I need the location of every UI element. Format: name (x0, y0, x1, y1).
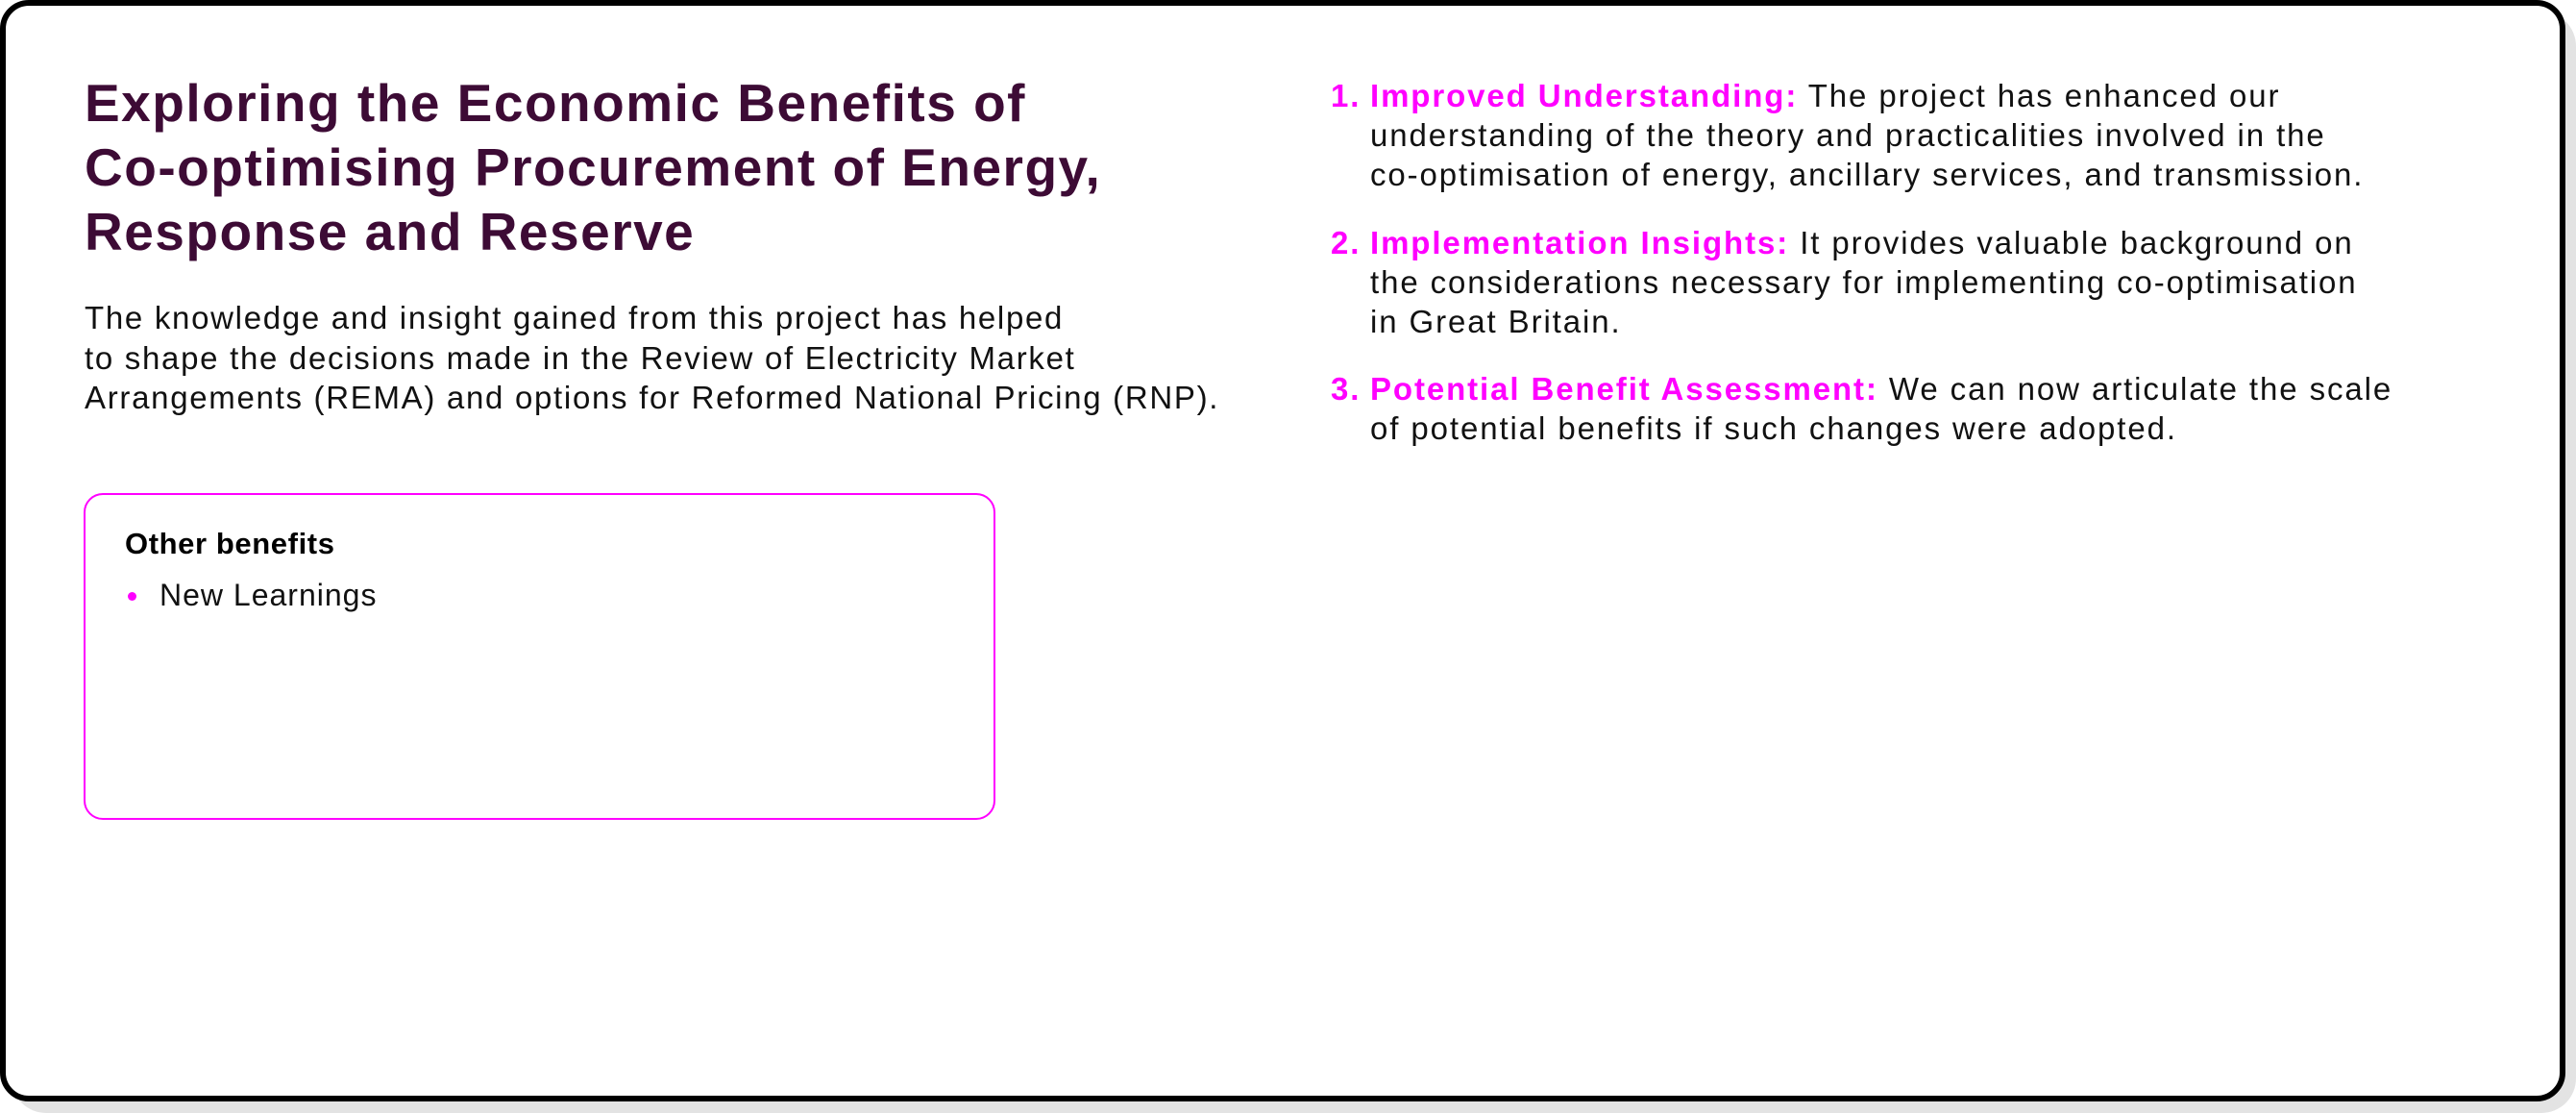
heading: other benefits: Other benefits (125, 527, 335, 560)
list item 2: in Great Britain. (1370, 304, 1622, 339)
list item 1 (1331, 78, 2364, 192)
intro paragraph: Arrangements (REMA) and options for Reformed National Pricing (RNP). (85, 380, 1219, 415)
list item 1: Improved Understanding: The project has enhanced our (1370, 78, 2280, 113)
list item 3 (1331, 371, 2392, 446)
bullet text: New Learnings (159, 578, 377, 612)
list item 2 (1331, 225, 2358, 339)
title: Co-optimising Procurement of Energy, (85, 137, 1101, 197)
intro paragraph (85, 300, 1219, 415)
intro paragraph: to shape the decisions made in the Review of Electricity Market (85, 340, 1076, 375)
list item 3: Potential Benefit Assessment: We can now articulate the scale (1370, 371, 2392, 407)
title: Exploring the Economic Benefits of (85, 73, 1026, 133)
list item 3: 3. (1331, 371, 1361, 407)
bullet dot (128, 592, 136, 601)
list item 1: 1. (1331, 78, 1361, 113)
title: Response and Reserve (85, 202, 695, 261)
intro paragraph: The knowledge and insight gained from this project has helped (85, 300, 1064, 335)
title (85, 73, 1101, 261)
list item 1: understanding of the theory and practicalities involved in the (1370, 117, 2326, 153)
list item 1: co-optimisation of energy, ancillary services, and transmission. (1370, 157, 2364, 192)
panel: other benefits (84, 493, 995, 820)
list item 3: of potential benefits if such changes were adopted. (1370, 410, 2177, 446)
list item 2: Implementation Insights: It provides valuable background on (1370, 225, 2354, 260)
list item 2: 2. (1331, 225, 1361, 260)
list item 2: the considerations necessary for implementing co-optimisation (1370, 264, 2358, 300)
